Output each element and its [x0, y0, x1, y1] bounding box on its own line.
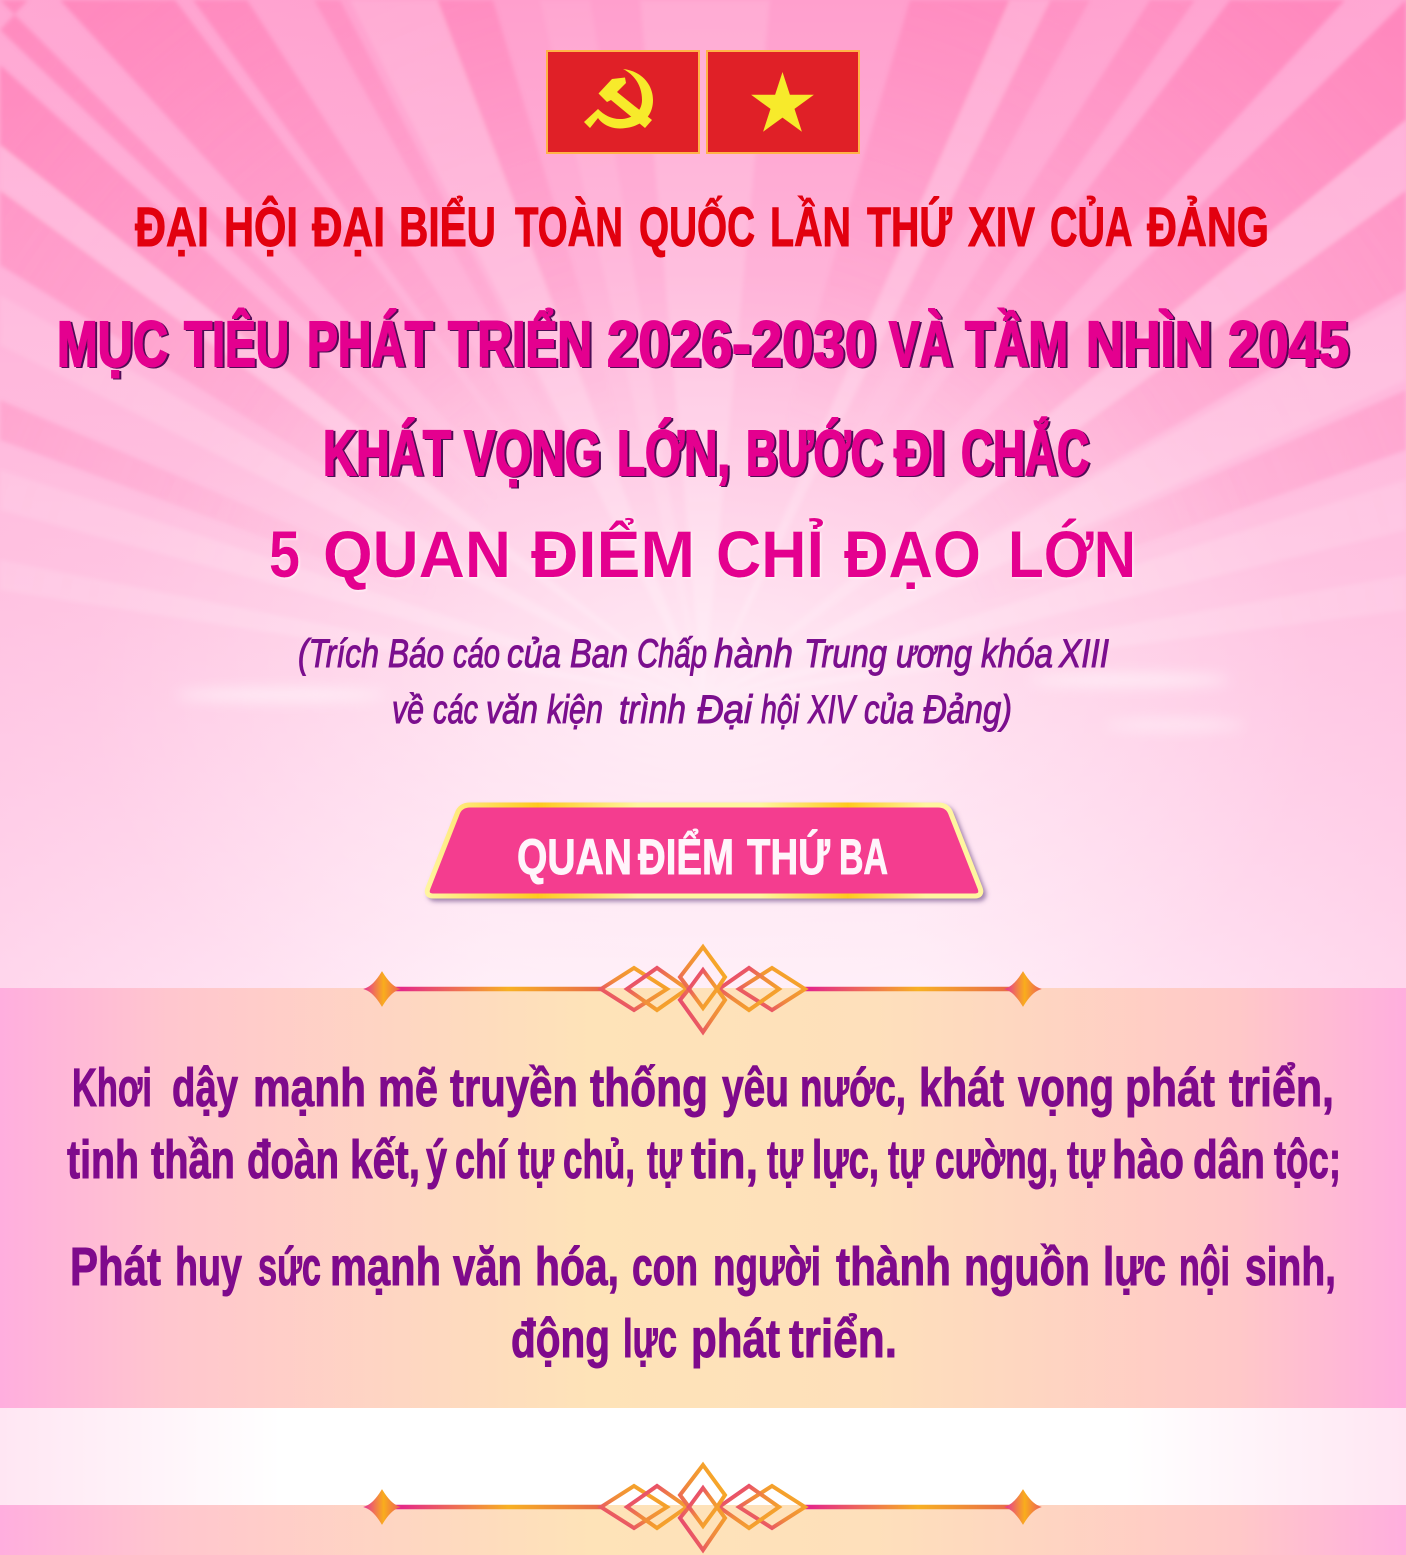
background with sun rays	[0, 0, 1406, 1110]
body text: second paragraph: động	[511, 1309, 610, 1369]
button label: QUAN	[517, 829, 632, 885]
body text: second paragraph: nguồn	[964, 1237, 1090, 1297]
title: slogan: KHÁT	[323, 417, 451, 489]
subtitle: source note: của	[864, 688, 914, 732]
subtitle: source note: XIII	[1058, 632, 1109, 676]
title: development goals: TẦM	[965, 308, 1068, 380]
title: five viewpoints: 5	[269, 517, 300, 591]
title: slogan: CHẮC	[961, 416, 1089, 489]
title: congress name: QUỐC	[639, 195, 755, 258]
title: five viewpoints: ĐẠO	[844, 517, 981, 591]
body text: first paragraph: triển,	[1229, 1058, 1334, 1118]
title: congress name: TOÀN	[515, 195, 623, 258]
subtitle: source note: Đại	[697, 688, 753, 732]
subtitle: source note: Chấp	[637, 632, 707, 676]
body text: first paragraph: tộc;	[1274, 1130, 1341, 1190]
body text: second paragraph: sức	[258, 1237, 321, 1297]
body text: second paragraph: lực	[623, 1309, 677, 1369]
title: congress name: ĐẠI	[135, 195, 209, 258]
title: slogan: BƯỚC	[746, 417, 882, 489]
body text: first paragraph: tin,	[691, 1130, 758, 1190]
body text: first paragraph: Khơi	[72, 1058, 152, 1118]
subtitle: source note: hành	[714, 632, 793, 676]
title: development goals: NHÌN	[1086, 308, 1212, 380]
body text: first paragraph: kết,	[350, 1130, 420, 1190]
body text: second paragraph: phát	[691, 1309, 780, 1369]
title: five viewpoints: QUAN	[323, 517, 511, 591]
subtitle: source note: khóa	[981, 632, 1053, 676]
body text: second paragraph: sinh,	[1245, 1237, 1336, 1297]
ornament divider top	[366, 947, 1039, 1032]
title: congress name: BIỂU	[399, 195, 496, 258]
subtitle: source note: các	[433, 688, 478, 732]
content band	[0, 988, 1406, 1408]
body text: first paragraph: chủ,	[563, 1130, 635, 1190]
title: development goals: PHÁT	[307, 308, 433, 380]
button: third viewpoint	[427, 805, 981, 896]
flag: gold star	[707, 51, 859, 153]
subtitle: source note: trình	[619, 688, 686, 732]
title: development goals: TRIỂN	[448, 307, 592, 380]
ornament divider bottom	[366, 1465, 1039, 1550]
body text: first paragraph: tự	[767, 1130, 804, 1190]
title: development goals: 2045	[1228, 308, 1349, 380]
body text: first paragraph: thống	[590, 1058, 708, 1118]
title: congress name: HỘI	[224, 195, 298, 258]
title: congress name: CỦA	[1050, 195, 1131, 258]
title: slogan: VỌNG	[464, 417, 601, 489]
body text: first paragraph: mạnh	[253, 1058, 366, 1118]
button label: THỨ	[747, 829, 830, 885]
body text: first paragraph: vọng	[1018, 1058, 1114, 1118]
button label: BA	[839, 829, 888, 885]
body text: first paragraph: hào	[1112, 1130, 1184, 1190]
title: congress name: XIV	[968, 195, 1035, 258]
body text: second paragraph: nội	[1179, 1237, 1230, 1297]
button label: ĐIỂM	[638, 829, 734, 885]
body text: second paragraph: thành	[836, 1237, 951, 1297]
body text: first paragraph: phát	[1125, 1058, 1215, 1118]
subtitle: source note: về	[392, 688, 424, 732]
title: development goals: MỤC	[57, 308, 168, 380]
body text: first paragraph: yêu	[722, 1058, 789, 1118]
body text: first paragraph: thần	[151, 1130, 235, 1190]
title: slogan: LỚN,	[617, 417, 730, 489]
subtitle: source note: Báo	[388, 632, 444, 676]
title: development goals: TIÊU	[184, 307, 289, 380]
subtitle: source note: cáo	[453, 632, 500, 676]
body text: second paragraph: triển.	[789, 1309, 897, 1369]
subtitle: source note: hội	[761, 688, 800, 732]
body text: first paragraph: mẽ	[378, 1058, 438, 1118]
flag: hammer and sickle	[547, 51, 699, 153]
title: congress name: THỨ	[867, 195, 952, 258]
subtitle: source note: kiện	[547, 688, 603, 732]
subtitle: source note: Ban	[570, 632, 628, 676]
body text: first paragraph: tự	[647, 1130, 683, 1190]
body text: second paragraph: người	[713, 1237, 821, 1297]
subtitle: source note	[298, 632, 1109, 732]
body text: first paragraph: ý	[426, 1130, 447, 1190]
body text: second paragraph: hóa,	[535, 1237, 619, 1297]
body text: second paragraph: văn	[453, 1237, 522, 1297]
title: congress name: ĐẠI	[312, 195, 385, 258]
subtitle: source note: của	[507, 632, 561, 676]
body text: first paragraph: tự	[518, 1130, 555, 1190]
body text: first paragraph: tinh	[67, 1130, 139, 1190]
body text: first paragraph: khát	[919, 1058, 1004, 1118]
body text: first paragraph: tự	[888, 1130, 925, 1190]
body text: first paragraph: tự	[1067, 1130, 1106, 1190]
lower band	[0, 1505, 1406, 1555]
subtitle: source note: (Trích	[298, 632, 379, 676]
white strip	[0, 1408, 1406, 1505]
body text: second paragraph: huy	[175, 1237, 242, 1297]
body text: first paragraph: dân	[1193, 1130, 1265, 1190]
body text: first paragraph: chí	[455, 1130, 508, 1190]
title: five viewpoints: LỚN	[1008, 517, 1136, 591]
body text: first paragraph: đoàn	[247, 1130, 339, 1190]
title: slogan: ĐI	[894, 417, 945, 489]
body text: first paragraph: truyền	[450, 1058, 578, 1118]
body text: second paragraph	[70, 1237, 1336, 1369]
body text: first paragraph: lực,	[812, 1130, 879, 1190]
body text: first paragraph	[67, 1058, 1341, 1190]
title: congress name: ĐẢNG	[1147, 195, 1269, 258]
body text: second paragraph: con	[632, 1237, 698, 1297]
title: five viewpoints: ĐIỂM	[531, 517, 695, 591]
body text: first paragraph: dậy	[172, 1058, 238, 1118]
title: development goals: 2026-2030	[607, 308, 876, 380]
title: five viewpoints: CHỈ	[716, 517, 824, 591]
body text: second paragraph: lực	[1103, 1237, 1166, 1297]
flags	[547, 51, 859, 153]
subtitle: source note: ương	[896, 632, 972, 676]
subtitle: source note: Trung	[804, 632, 887, 676]
subtitle: source note: XIV	[807, 688, 857, 732]
title: congress name: LẦN	[770, 195, 851, 258]
body text: first paragraph: cường,	[935, 1130, 1058, 1190]
body text: second paragraph: mạnh	[330, 1237, 441, 1297]
subtitle: source note: văn	[486, 688, 538, 732]
subtitle: source note: Đảng)	[923, 688, 1012, 732]
body text: first paragraph: nước,	[800, 1058, 906, 1118]
title: development goals: VÀ	[889, 308, 952, 380]
body text: second paragraph: Phát	[70, 1237, 161, 1297]
